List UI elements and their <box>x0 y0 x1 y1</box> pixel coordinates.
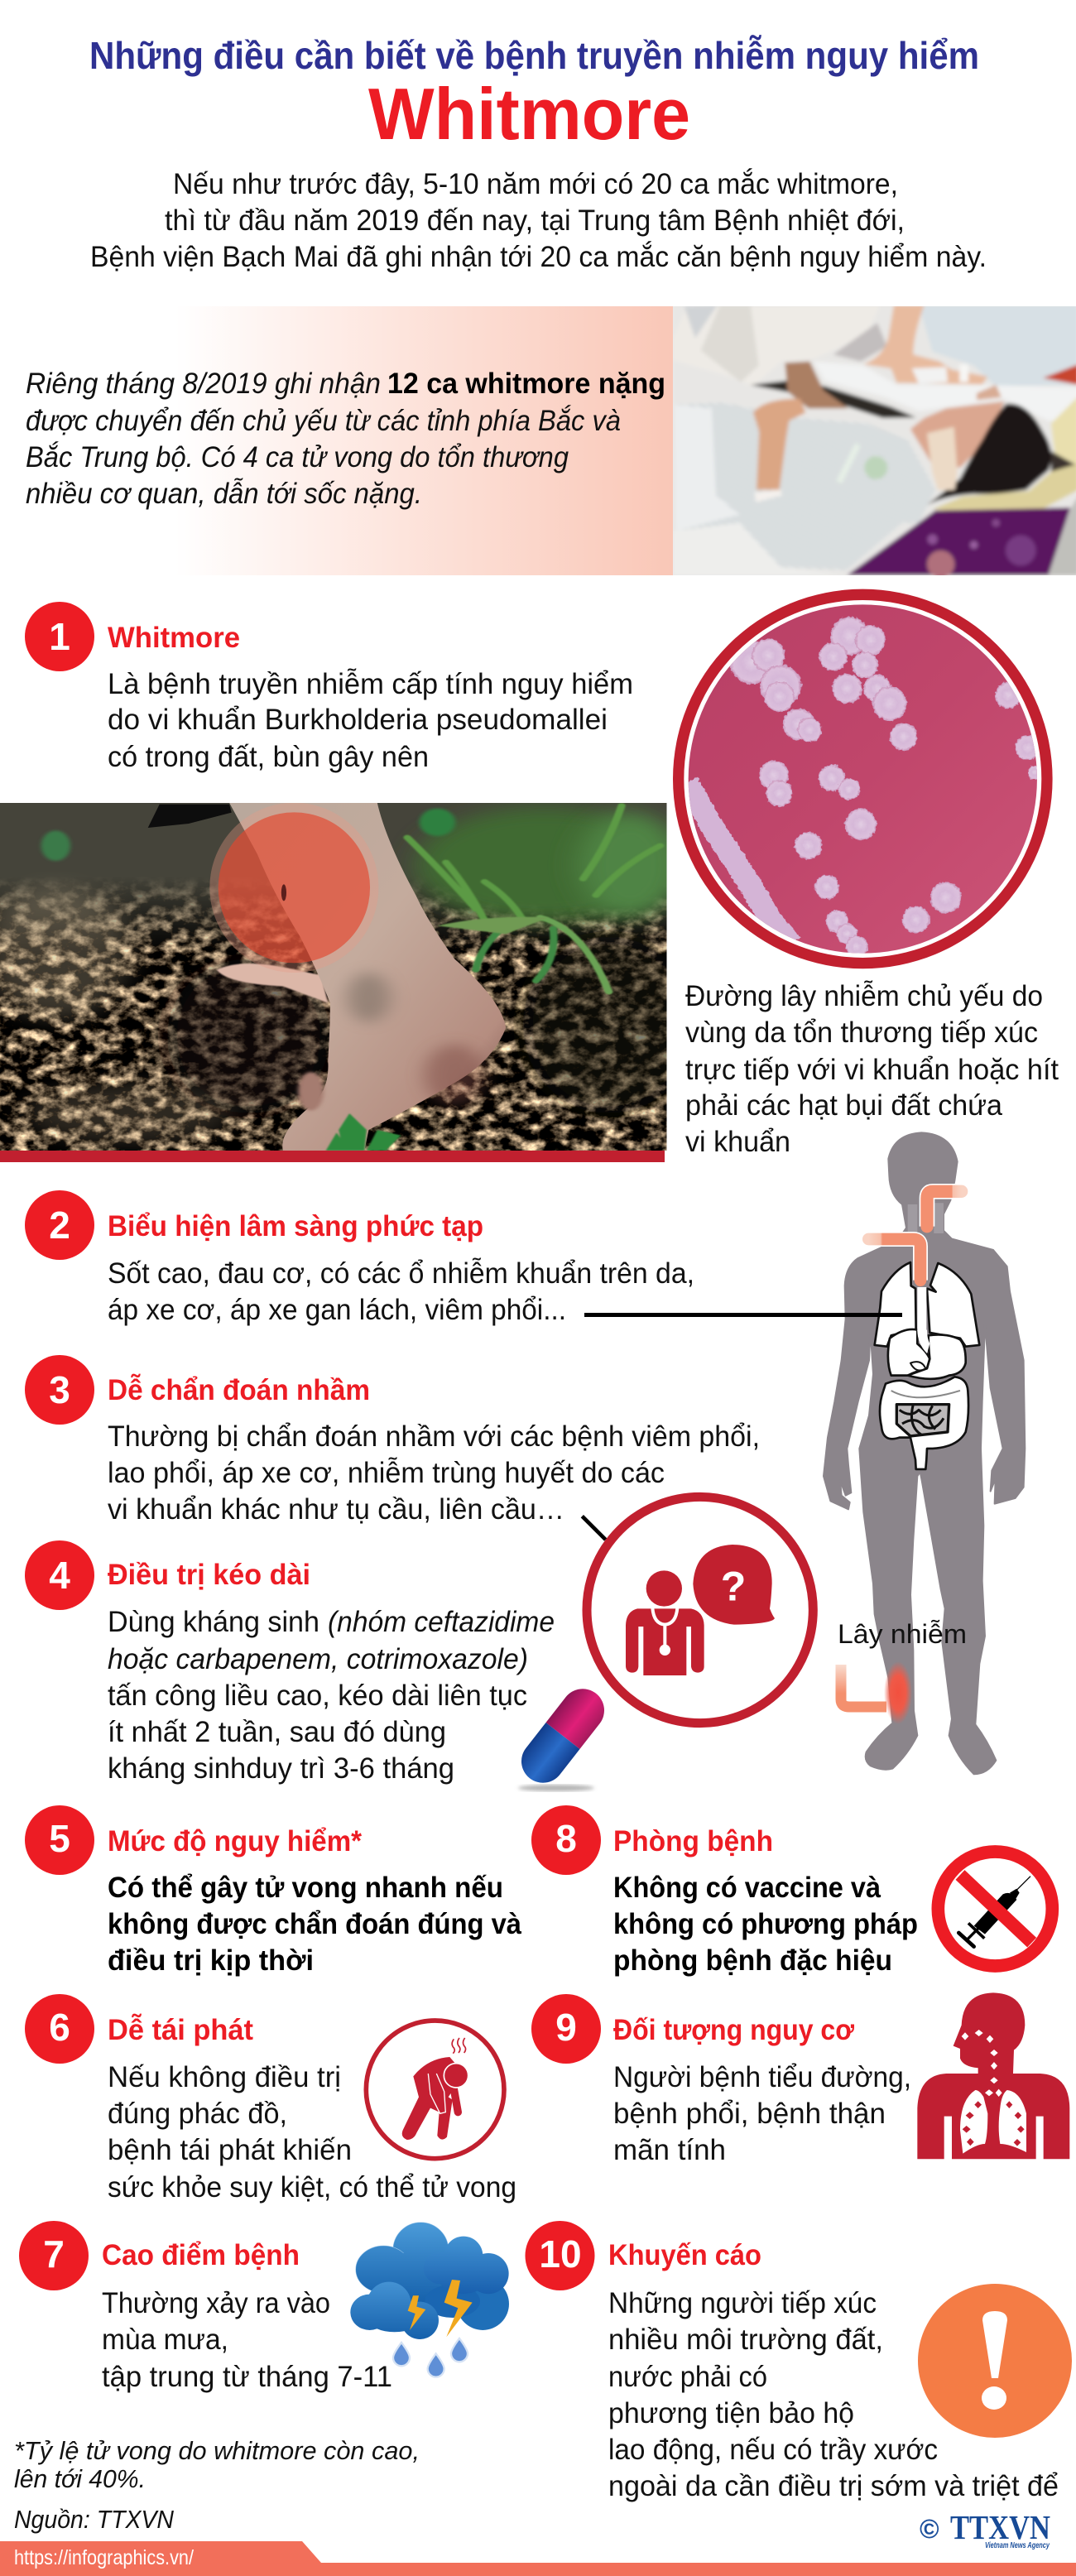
icon: no vaccine syringe <box>938 1852 1052 1966</box>
section 7 text: Cao điểm bệnh <box>102 2239 300 2271</box>
panel: August 2019 callout: 12 ca whitmore nặng <box>387 368 665 400</box>
human body figure with organs <box>824 1132 1025 1774</box>
transmission text: trực tiếp với vi khuẩn hoặc hít <box>685 1054 1059 1086</box>
section 10 text: Những người tiếp xúc <box>608 2287 877 2319</box>
section 2 text: áp xe cơ, áp xe gan lách, viêm phổi... <box>108 1294 566 1326</box>
number 8 badge <box>531 1805 601 1875</box>
photo: bare foot on soil <box>0 799 694 1155</box>
section 5 text: không được chẩn đoán đúng và <box>108 1908 521 1940</box>
connector line: symptoms to lungs <box>584 1313 902 1317</box>
section 6 text: Dễ tái phát <box>108 2013 253 2046</box>
transmission text: vi khuẩn <box>685 1126 790 1158</box>
section 4 text: ít nhất 2 tuần, sau đó dùng <box>108 1716 446 1748</box>
panel: August 2019 callout: Riêng tháng 8/2019 ghi nhận <box>26 368 381 400</box>
petri dish with bacteria colonies <box>673 589 1053 968</box>
section 10 text <box>608 2239 1059 2502</box>
airway arrows <box>927 1191 962 1227</box>
number 6 badge: 6 <box>49 2006 70 2049</box>
organs <box>875 1262 979 1469</box>
intro text <box>90 168 987 273</box>
"Lây nhiễm" label and skin-entry marker: Lây nhiễm <box>838 1619 967 1649</box>
section 9 text: Đối tượng nguy cơ <box>613 2014 854 2046</box>
section 9 text: mãn tính <box>613 2134 726 2166</box>
footnote: *Tỷ lệ tử vong do whitmore còn cao, <box>14 2436 420 2465</box>
section 6 text: sức khỏe suy kiệt, có thể tử vong <box>108 2171 516 2204</box>
number 6 badge <box>25 1994 94 2064</box>
section 3 text: Thường bị chẩn đoán nhầm với các bệnh viêm phổi, <box>108 1420 760 1453</box>
section 1 text: do vi khuẩn Burkholderia pseudomallei <box>108 704 608 736</box>
footer bar with URL <box>0 2541 1076 2576</box>
section 7 text: tập trung từ tháng 7-11 <box>102 2361 392 2393</box>
section 6 text: Nếu không điều trị <box>108 2061 341 2093</box>
number 10 badge <box>525 2221 594 2290</box>
number 2 badge: 2 <box>49 1204 70 1247</box>
icon: infected airways and lungs <box>917 1992 1069 2159</box>
section 4 text: kháng sinhduy trì 3-6 tháng <box>108 1752 454 1785</box>
section 4 text: Điều trị kéo dài <box>108 1559 310 1591</box>
"Lây nhiễm" label and skin-entry marker <box>838 1619 967 1724</box>
number 1 badge: 1 <box>49 615 70 658</box>
source: Nguồn: TTXVN <box>14 2505 175 2534</box>
section 6 text <box>108 2013 516 2204</box>
section 5 text: Có thể gây tử vong nhanh nếu <box>108 1872 503 1904</box>
transmission text: vùng da tổn thương tiếp xúc <box>685 1016 1038 1049</box>
section 8 text: phòng bệnh đặc hiệu <box>613 1944 892 1977</box>
section 9 text <box>613 2014 911 2166</box>
panel: August 2019 callout: nhiều cơ quan, dẫn tới sốc nặng. <box>26 478 422 510</box>
number 10 badge: 10 <box>539 2232 582 2276</box>
number 2 badge <box>25 1190 94 1260</box>
number 8 badge: 8 <box>555 1817 577 1860</box>
section 8 text: Không có vaccine và <box>613 1872 881 1904</box>
section 8 text <box>613 1825 918 1977</box>
section 2 text: Sốt cao, đau cơ, có các ổ nhiễm khuẩn trên da, <box>108 1257 694 1290</box>
section 10 text: phương tiện bảo hộ <box>608 2397 854 2429</box>
section 2 text <box>108 1210 694 1326</box>
section 6 text: đúng phác đồ, <box>108 2098 287 2130</box>
section 9 text: bệnh phổi, bệnh thận <box>613 2098 886 2130</box>
section 7 text <box>102 2239 392 2393</box>
section 3 text: lao phổi, áp xe cơ, nhiễm trùng huyết do các <box>108 1457 665 1489</box>
section 10 text: nước phải có <box>608 2361 767 2393</box>
section 7 text: Thường xảy ra vào <box>102 2287 330 2319</box>
section 10 text: lao động, nếu có trầy xước <box>608 2434 938 2466</box>
section 3 text <box>108 1373 760 1526</box>
photo caption bar <box>0 1151 665 1162</box>
section 2 text: Biểu hiện lâm sàng phức tạp <box>108 1210 483 1242</box>
icon: exhausted person <box>366 2021 504 2159</box>
section 5 text: Mức độ nguy hiểm* <box>108 1825 362 1858</box>
icon: doctor with question bubble <box>582 1497 813 1723</box>
title: Whitmore <box>368 73 690 155</box>
fern <box>326 1113 401 1151</box>
section 3 text: vi khuẩn khác như tụ cầu, liên cầu… <box>108 1493 564 1526</box>
footer bar with URL: https://infographics.vn/ <box>14 2546 194 2569</box>
section 4 text: tấn công liều cao, kéo dài liên tục <box>108 1680 527 1712</box>
number 4 badge: 4 <box>49 1554 70 1597</box>
panel: August 2019 callout: được chuyển đến chủ yếu từ các tỉnh phía Bắc và <box>26 405 621 437</box>
section 1 text: Là bệnh truyền nhiễm cấp tính nguy hiểm <box>108 668 633 700</box>
section 8 text: Phòng bệnh <box>613 1825 773 1858</box>
TTXVN logo: © <box>920 2514 939 2544</box>
section 6 text: bệnh tái phát khiến <box>108 2134 352 2166</box>
TTXVN logo: Vietnam News Agency <box>985 2541 1050 2550</box>
number 9 badge <box>531 1994 601 2064</box>
panel: August 2019 callout: Bắc Trung bộ. Có 4 ca tử vong do tổn thương <box>26 441 569 473</box>
section 10 text: Khuyến cáo <box>608 2239 761 2271</box>
section 9 text: Người bệnh tiểu đường, <box>613 2061 911 2093</box>
number 4 badge <box>25 1540 94 1610</box>
footnote: lên tới 40%. <box>14 2464 146 2493</box>
number 3 badge: 3 <box>49 1368 70 1411</box>
icon: warning exclamation <box>918 2284 1072 2438</box>
intro text: Nếu như trước đây, 5-10 năm mới có 20 ca mắc whitmore, <box>173 168 898 200</box>
panel: August 2019 callout <box>0 306 673 575</box>
number 1 badge <box>25 602 94 671</box>
infection highlight <box>209 803 378 973</box>
number 7 badge <box>19 2221 89 2290</box>
section 7 text: mùa mưa, <box>102 2324 228 2356</box>
intro text: thì từ đầu năm 2019 đến nay, tại Trung tâm Bệnh nhiệt đới, <box>165 204 905 237</box>
section 1 text: có trong đất, bùn gây nên <box>108 741 429 773</box>
section 1 text: Whitmore <box>108 622 240 654</box>
section 3 text: Dễ chẩn đoán nhầm <box>108 1373 370 1406</box>
intro text: Bệnh viện Bạch Mai đã ghi nhận tới 20 ca mắc căn bệnh nguy hiểm này. <box>90 241 987 273</box>
number 9 badge: 9 <box>555 2006 577 2049</box>
number 7 badge: 7 <box>43 2232 65 2276</box>
number 5 badge <box>25 1805 94 1875</box>
transmission text <box>685 980 1059 1158</box>
icon: antibiotic capsule <box>512 1680 613 1791</box>
TTXVN logo <box>920 2508 1050 2550</box>
section 4 text: (nhóm ceftazidime <box>328 1606 555 1638</box>
section 8 text: không có phương pháp <box>613 1908 918 1940</box>
section 5 text <box>108 1825 521 1977</box>
number 5 badge: 5 <box>49 1817 70 1860</box>
photo: patient in hospital bed <box>670 302 1076 578</box>
icon: doctor with question bubble: ? <box>721 1563 746 1609</box>
section 4 text <box>108 1559 555 1785</box>
section 10 text: ngoài da cần điều trị sớm và triệt để <box>608 2470 1059 2502</box>
title <box>89 34 979 155</box>
title: Những điều cần biết về bệnh truyền nhiễm nguy hiểm <box>89 34 979 77</box>
TTXVN logo: TTXVN <box>950 2508 1050 2546</box>
number 3 badge <box>25 1355 94 1425</box>
section 4 text: Dùng kháng sinh <box>108 1606 319 1638</box>
section 10 text: nhiều môi trường đất, <box>608 2324 883 2356</box>
soil texture <box>0 857 670 1155</box>
section 5 text: điều trị kịp thời <box>108 1944 314 1977</box>
transmission text: phải các hạt bụi đất chứa <box>685 1089 1003 1122</box>
footnote <box>14 2436 420 2493</box>
icon: storm clouds <box>350 2223 509 2377</box>
section 4 text: hoặc carbapenem, cotrimoxazole) <box>108 1643 528 1675</box>
transmission text: Đường lây nhiễm chủ yếu do <box>685 980 1043 1012</box>
section 1 text <box>108 622 633 773</box>
